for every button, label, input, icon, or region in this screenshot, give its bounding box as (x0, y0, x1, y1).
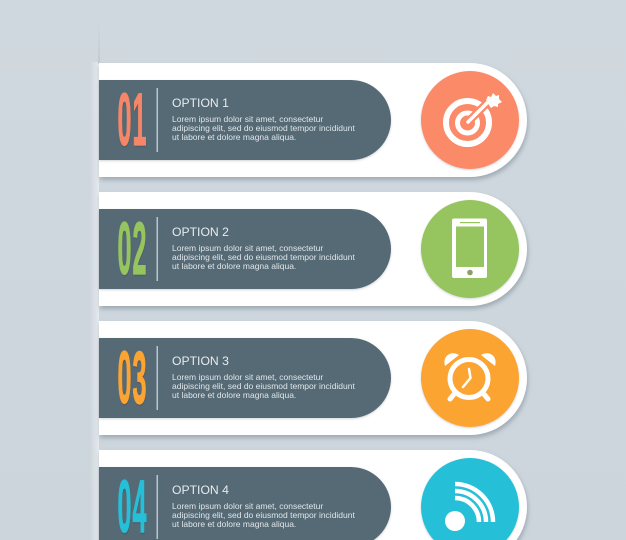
text 4: Lorem ipsum dolor sit amet, consectetur (172, 501, 323, 511)
divider 4 (156, 475, 158, 539)
heading 1: OPTION 1 (172, 96, 229, 110)
dark label 3 (99, 338, 391, 418)
text 2: adipiscing elit, sed do eiusmod tempor incididunt (172, 252, 355, 262)
white band 1 (99, 63, 527, 177)
text 2: ut labore et dolore magna aliqua. (172, 261, 296, 271)
divider 1 (156, 88, 158, 152)
text 3: adipiscing elit, sed do eiusmod tempor incididunt (172, 381, 355, 391)
number 03: 03 (118, 336, 148, 419)
number 02: 02 (118, 207, 148, 290)
white band 3 (99, 321, 527, 435)
text 1: adipiscing elit, sed do eiusmod tempor incididunt (172, 123, 355, 133)
text 2: Lorem ipsum dolor sit amet, consectetur (172, 243, 323, 253)
dark label 4 (99, 467, 391, 540)
heading 3: OPTION 3 (172, 354, 229, 368)
icon: wifi signal (421, 458, 519, 540)
white band 2 (99, 192, 527, 306)
icon: alarm clock (421, 329, 519, 427)
panel: option 4 (99, 450, 527, 540)
text 4: adipiscing elit, sed do eiusmod tempor incididunt (172, 510, 355, 520)
divider 3 (156, 346, 158, 410)
icon: smartphone (421, 200, 519, 298)
divider 2 (156, 217, 158, 281)
dark label 2 (99, 209, 391, 289)
text 3: Lorem ipsum dolor sit amet, consectetur (172, 372, 323, 382)
left fold glow (90, 62, 99, 540)
text 1: ut labore et dolore magna aliqua. (172, 132, 296, 142)
top fold line (98, 20, 100, 64)
dark label 1 (99, 80, 391, 160)
number 01: 01 (118, 78, 148, 161)
heading 4: OPTION 4 (172, 483, 229, 497)
panel: option 3 (99, 321, 527, 435)
icon: target (421, 71, 519, 169)
panel: option 2 (99, 192, 527, 306)
white band 4 (99, 450, 527, 540)
text 1: Lorem ipsum dolor sit amet, consectetur (172, 114, 323, 124)
text 3: ut labore et dolore magna aliqua. (172, 390, 296, 400)
text 4: ut labore et dolore magna aliqua. (172, 519, 296, 529)
heading 2: OPTION 2 (172, 225, 229, 239)
panel: option 1 (99, 63, 527, 177)
